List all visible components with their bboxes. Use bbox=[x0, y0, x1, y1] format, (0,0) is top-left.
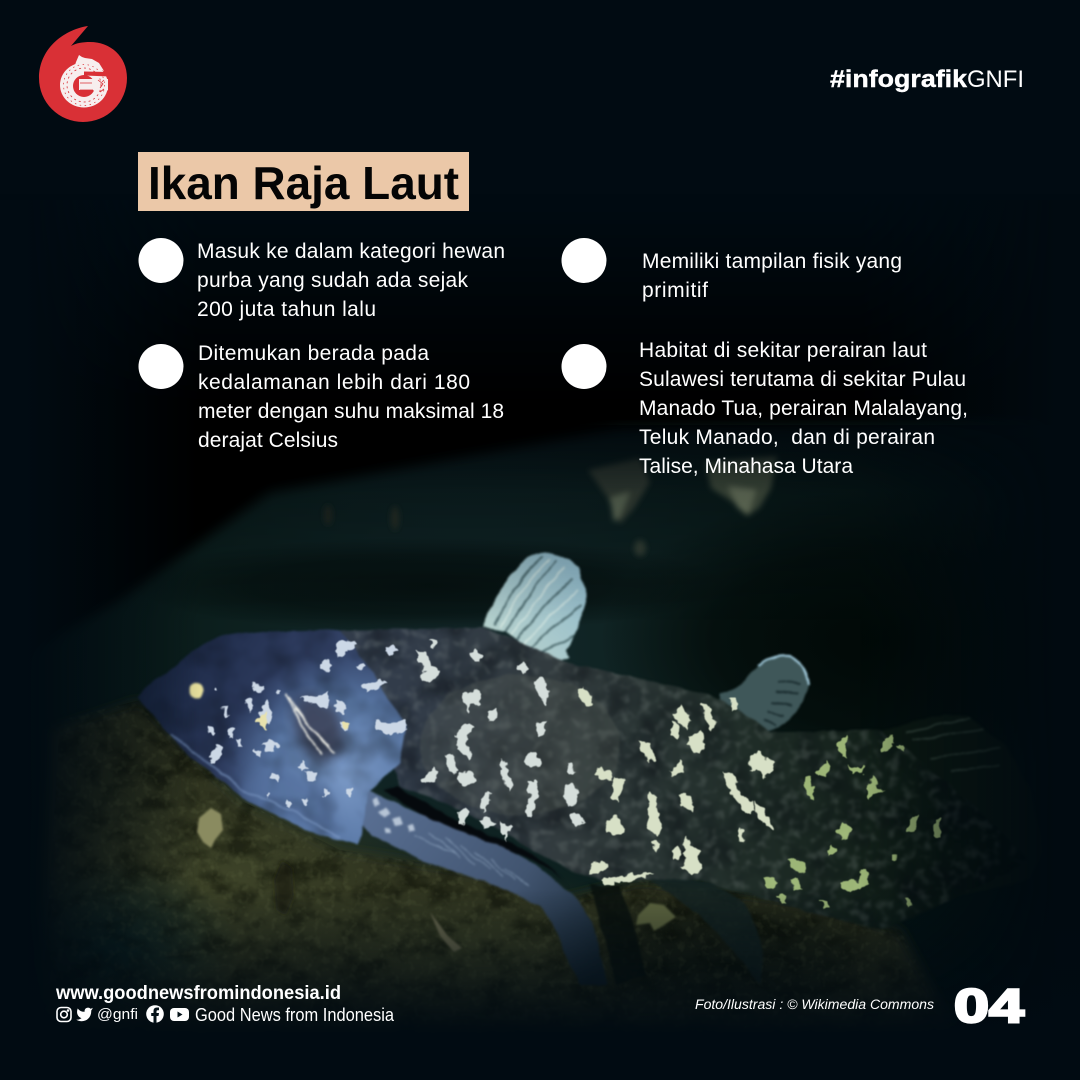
page number: 04 bbox=[954, 979, 1024, 1032]
hashtag: GNFI bbox=[967, 66, 1024, 93]
pale stones on the seabed bbox=[197, 808, 223, 848]
handle: @gnfi bbox=[97, 1006, 138, 1023]
fact: depth and temperature bbox=[138, 342, 504, 452]
logo bbox=[39, 26, 127, 122]
seabed rock bbox=[58, 701, 924, 1010]
fact: habitat: Talise, Minahasa Utara bbox=[639, 455, 853, 478]
icon: youtube bbox=[170, 1008, 189, 1021]
head light patch bbox=[228, 658, 408, 845]
tail fin bbox=[870, 714, 1045, 900]
body bbox=[340, 628, 1030, 930]
fact: habitat bbox=[562, 339, 968, 478]
icon: twitter bbox=[76, 1008, 93, 1021]
fact: depth and temperature: Ditemukan berada pada bbox=[198, 342, 429, 365]
page name: Good News from Indonesia bbox=[195, 1005, 395, 1025]
fact: prehistoric animal bbox=[138, 238, 505, 321]
logo mark: red swirl bbox=[39, 26, 127, 122]
fact: prehistoric animal: purba yang sudah ada sejak bbox=[197, 269, 468, 292]
icon: instagram bbox=[57, 1008, 71, 1022]
icon: facebook bbox=[146, 1005, 164, 1023]
fact: habitat: Habitat di sekitar perairan laut bbox=[639, 339, 927, 362]
website: www.goodnewsfromindonesia.id bbox=[55, 983, 341, 1004]
hashtag bbox=[830, 66, 1024, 93]
fact: primitive appearance bbox=[562, 238, 902, 302]
eye bbox=[190, 683, 204, 699]
fact: prehistoric animal: 200 juta tahun lalu bbox=[197, 298, 376, 321]
water and cave backdrop bbox=[0, 420, 1080, 1060]
fact: depth and temperature: derajat Celsius bbox=[198, 429, 338, 452]
second dorsal fin bbox=[720, 656, 809, 732]
tail spots bbox=[762, 734, 941, 908]
fact: depth and temperature: kedalamanan lebih dari 180 bbox=[198, 371, 470, 394]
hashtag: #infografik bbox=[830, 66, 968, 93]
body spots bbox=[418, 640, 585, 841]
fact: habitat: Manado Tua, perairan Malalayang, bbox=[639, 397, 968, 420]
title: Ikan Raja Laut bbox=[148, 157, 459, 209]
first dorsal fin bbox=[483, 552, 586, 662]
logo emblem: white eagle G bbox=[60, 55, 110, 108]
head spots bbox=[207, 639, 407, 808]
hanging rocks bbox=[324, 456, 777, 556]
mid body spots bbox=[578, 685, 773, 886]
fact: primitive appearance: Memiliki tampilan fisik yang bbox=[642, 250, 902, 273]
dark gap under body bbox=[385, 785, 570, 888]
fact: habitat: Teluk Manado, dan di perairan bbox=[639, 426, 935, 449]
footer: website and social bbox=[55, 983, 395, 1025]
fact: habitat: Sulawesi terutama di sekitar Pulau bbox=[639, 368, 966, 391]
head bbox=[138, 628, 408, 846]
jaw line bbox=[170, 733, 340, 838]
rear lower fin bbox=[650, 879, 763, 985]
fact: prehistoric animal: Masuk ke dalam kategori hewan bbox=[197, 240, 505, 263]
body texture bbox=[354, 628, 990, 928]
fact: depth and temperature: meter dengan suhu maksimal 18 bbox=[198, 400, 504, 423]
photo credit: Foto/Ilustrasi : © Wikimedia Commons bbox=[695, 997, 934, 1012]
pale yellow head spots bbox=[256, 711, 350, 730]
fact: primitive appearance: primitif bbox=[642, 279, 708, 302]
fish spots bbox=[207, 639, 941, 908]
fish bbox=[130, 552, 1045, 985]
pectoral fin bbox=[358, 790, 606, 985]
gill stripes bbox=[287, 695, 335, 755]
